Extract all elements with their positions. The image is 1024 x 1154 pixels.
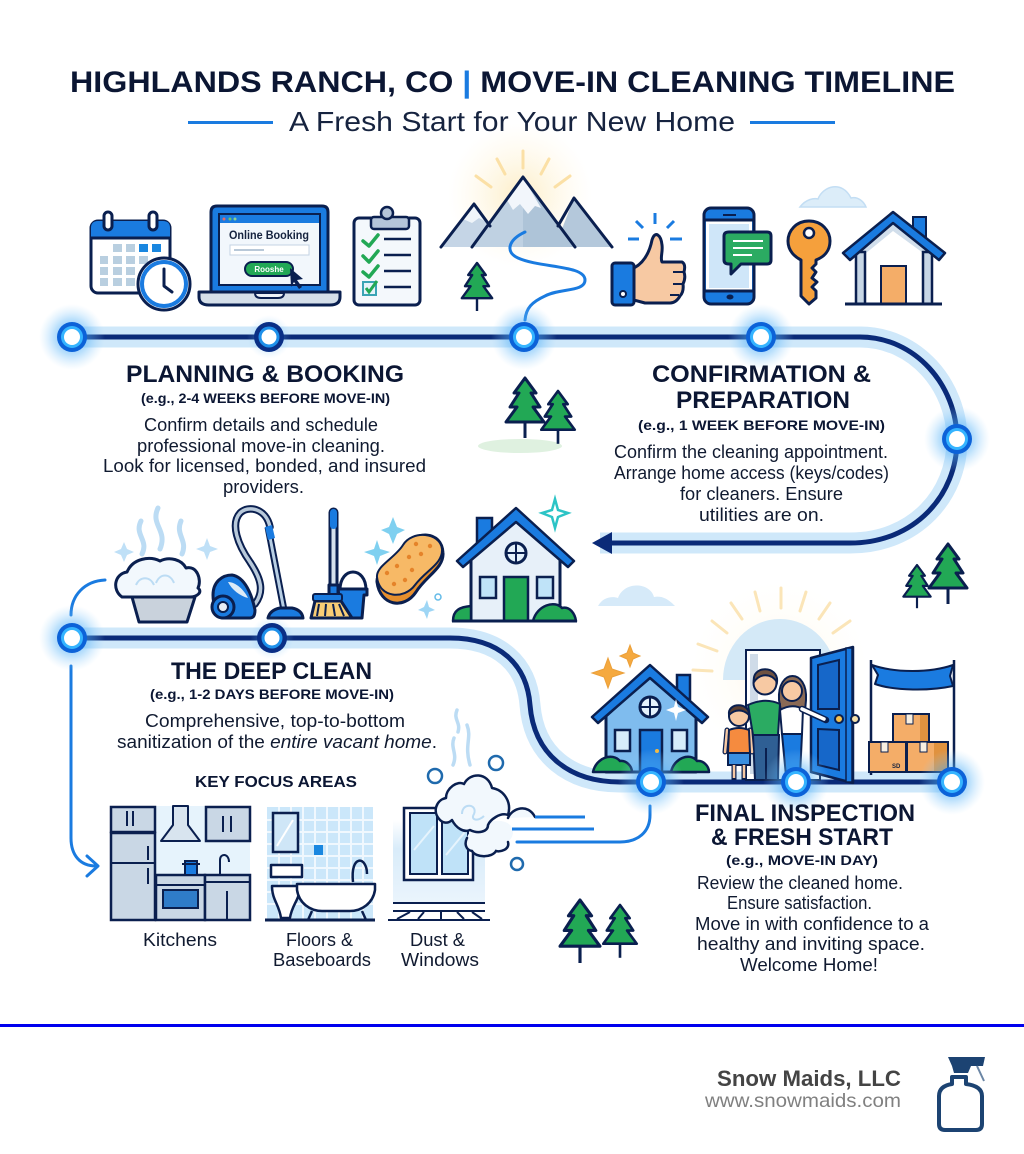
icon: key	[788, 221, 830, 304]
man	[748, 669, 780, 780]
icon: dust cloud and wind	[428, 710, 594, 870]
icon: soap basin	[114, 508, 218, 622]
label: kitchens: Kitchens	[143, 930, 217, 950]
subtitle: A Fresh Start for Your New Home	[289, 106, 735, 137]
text block: final inspection: Review the cleaned home.	[697, 873, 903, 893]
icon: checklist clipboard	[354, 207, 420, 305]
icon: vacuum cleaner	[212, 509, 303, 618]
icon: bathroom tiles	[265, 807, 375, 920]
text block: the deep clean: THE DEEP CLEAN	[171, 658, 372, 685]
icon: cloud top right	[800, 187, 866, 207]
label: floors and baseboards	[273, 930, 371, 970]
icon: sun rays behind door	[692, 582, 868, 758]
text block: the deep clean: sanitization of the entire vacant home .	[117, 732, 437, 752]
text block: confirmation and preparation: for cleaners. Ensure	[680, 484, 843, 504]
subtitle	[188, 106, 835, 137]
text block: planning and booking: PLANNING & BOOKING	[126, 361, 404, 388]
text block: planning and booking: Look for licensed, bonded, and insured	[103, 456, 426, 476]
text block: confirmation and preparation: (e.g., 1 WEEK BEFORE MOVE-IN)	[638, 417, 885, 433]
title: HIGHLANDS RANCH, CO | MOVE-IN CLEANING TIMELINE	[70, 66, 955, 99]
icon: window	[388, 808, 490, 920]
text block: confirmation and preparation: utilities are on.	[699, 505, 824, 525]
text block: final inspection: & FRESH START	[711, 824, 893, 851]
footer brand text	[704, 1066, 901, 1112]
text block: confirmation and preparation: PREPARATION	[676, 387, 850, 414]
text block: the deep clean: Comprehensive, top-to-bottom	[145, 711, 405, 731]
icon: final house	[592, 645, 709, 772]
icon: house top right	[843, 212, 945, 304]
icon: sponge	[364, 517, 443, 619]
icon: spray bottle	[939, 1057, 985, 1130]
timeline: lower path	[72, 638, 952, 782]
nodes upper	[39, 304, 990, 472]
icon: phone with message	[704, 208, 771, 304]
text block: the deep clean	[117, 658, 437, 752]
text block: final inspection: FINAL INSPECTION	[695, 800, 915, 827]
text block: the deep clean: (e.g., 1-2 DAYS BEFORE MOVE-IN)	[150, 686, 394, 702]
label: dust and windows: Windows	[401, 950, 479, 970]
text block: final inspection: (e.g., MOVE-IN DAY)	[726, 852, 878, 868]
text block: planning and booking: providers.	[223, 477, 304, 497]
icon: banner and boxes	[869, 660, 954, 775]
label: dust and windows: Dust &	[410, 930, 465, 950]
text block: final inspection	[695, 800, 930, 975]
icon: door and family	[725, 647, 859, 783]
footer divider	[0, 1024, 1024, 1027]
trees bottom	[560, 900, 637, 963]
text block: final inspection: Welcome Home!	[740, 955, 878, 975]
label: button: Rooshe	[254, 265, 284, 274]
text block: planning and booking: Confirm details and schedule	[144, 415, 378, 435]
nodes lower	[39, 605, 985, 815]
text block: final inspection: Ensure satisfaction.	[727, 893, 872, 913]
text block: confirmation and preparation: Arrange home access (keys/codes)	[614, 463, 889, 483]
text block: planning and booking: professional move-in cleaning.	[137, 436, 385, 456]
label: floors and baseboards: Floors &	[286, 930, 353, 950]
text block: confirmation and preparation: Confirm the cleaning appointment.	[614, 442, 888, 462]
text block: final inspection: Move in with confidence to a	[695, 914, 930, 934]
icon: kitchen	[110, 806, 250, 920]
label: floors and baseboards: Baseboards	[273, 950, 371, 970]
icon: small tree	[462, 263, 492, 311]
label: online booking: Online Booking	[229, 228, 309, 242]
footer brand text: Snow Maids, LLC	[717, 1066, 901, 1091]
text block: confirmation and preparation: CONFIRMATION &	[652, 361, 871, 388]
timeline: upper path	[72, 337, 957, 554]
text block: planning and booking: (e.g., 2-4 WEEKS BEFORE MOVE-IN)	[141, 390, 390, 406]
icon: calendar and clock	[91, 212, 190, 310]
text block: confirmation and preparation	[614, 361, 889, 525]
icon: cloud centre right	[598, 586, 675, 606]
heading: key focus areas: KEY FOCUS AREAS	[195, 774, 357, 791]
trees centre	[478, 378, 575, 453]
text block: planning and booking	[103, 361, 426, 497]
icon: thumbs up	[612, 213, 685, 305]
label: dust and windows	[401, 930, 479, 970]
box label: SD	[892, 764, 901, 770]
trees right	[903, 544, 967, 608]
icon: broom and bucket	[311, 509, 367, 618]
footer brand text: www.snowmaids.com	[704, 1090, 901, 1112]
connector arrows	[71, 580, 650, 876]
icon: mountains with sun	[441, 123, 612, 320]
child	[725, 705, 752, 780]
woman	[779, 676, 826, 776]
icon: laptop online booking	[199, 206, 340, 305]
icon: clean house with sparkle	[452, 499, 577, 621]
text block: final inspection: healthy and inviting space.	[697, 934, 925, 954]
